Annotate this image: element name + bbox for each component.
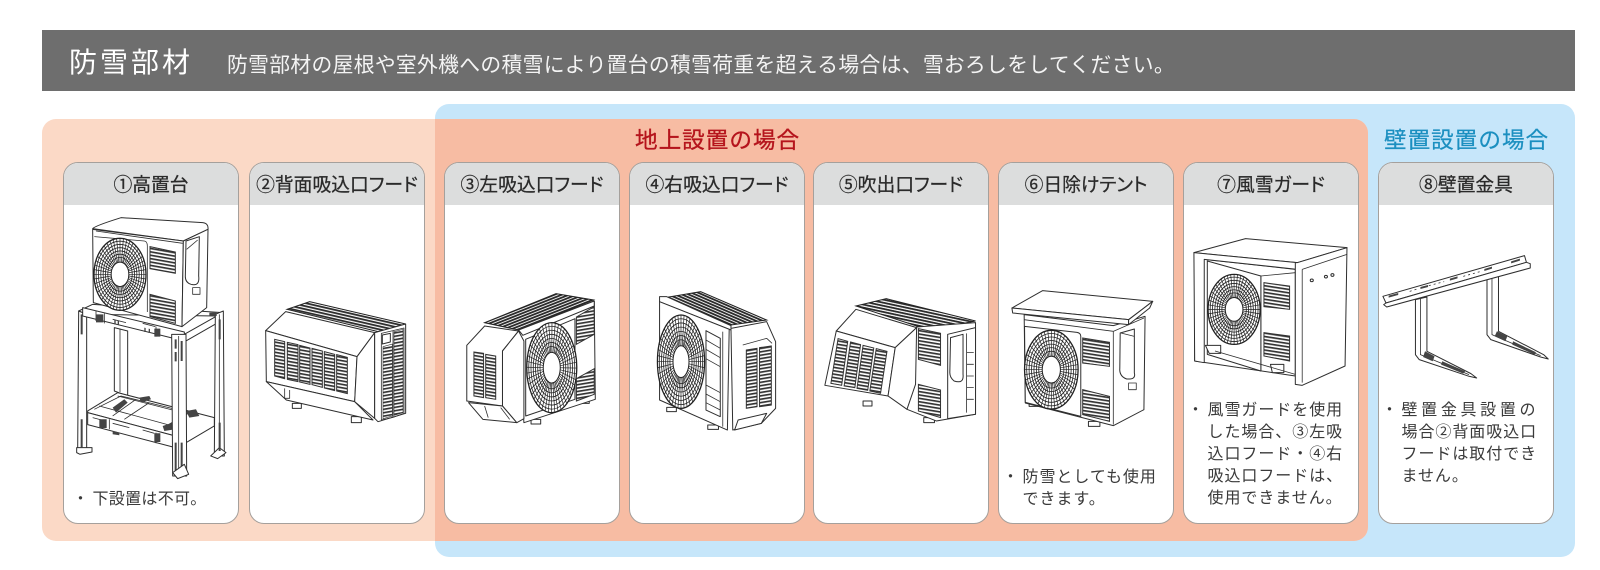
note <box>1188 401 1343 507</box>
note: ・ <box>1002 468 1019 486</box>
note: 使用できません。 <box>1208 490 1343 507</box>
note: 場合②背面吸込口 <box>1402 424 1537 441</box>
panel: overlap of ground-mount and wall-mount <box>435 119 1368 541</box>
illustration: left intake hood on unit <box>466 293 596 424</box>
illustration: outdoor unit on high stand <box>76 217 226 480</box>
illustration: outlet hood on unit <box>824 298 976 424</box>
card title <box>445 164 619 205</box>
card title <box>1184 164 1358 205</box>
card title: ⑤吹出口フード <box>839 174 963 195</box>
note: ・ <box>1188 402 1204 418</box>
card title: ②背面吸込口フード <box>256 174 418 195</box>
note: 吸込口フードは、 <box>1208 468 1343 485</box>
card title <box>1379 164 1553 205</box>
note: ません。 <box>1402 468 1469 485</box>
note: ・ <box>72 490 89 508</box>
card title <box>64 164 238 205</box>
illustration: right intake hood on unit <box>656 291 776 430</box>
panel: wall-mount background <box>435 104 1575 557</box>
note: 壁置金具設置の <box>1402 402 1539 418</box>
note: できます。 <box>1022 491 1106 508</box>
card title: ⑧壁置金具 <box>1419 174 1513 195</box>
note: 下設置は不可。 <box>92 490 207 508</box>
card 1: high stand <box>63 162 239 524</box>
card 3: left intake hood <box>444 162 620 524</box>
card title <box>630 164 804 205</box>
card title: ⑦風雪ガード <box>1217 174 1325 195</box>
header band <box>42 30 1575 91</box>
card 7: wind and snow guard <box>1183 162 1359 524</box>
heading: wall installation: 壁置設置の場合 <box>1384 128 1549 153</box>
note: 防雪としても使用 <box>1022 468 1157 486</box>
card 5: outlet hood <box>813 162 989 524</box>
note <box>1382 401 1539 485</box>
note <box>1002 468 1157 508</box>
note: した場合、③左吸 <box>1208 424 1343 441</box>
card 8: wall bracket <box>1378 162 1554 524</box>
panel: ground-mount background <box>42 119 1368 541</box>
card title <box>814 164 988 205</box>
illustration: wall mounting bracket <box>1382 255 1549 378</box>
header description: 防雪部材の屋根や室外機への積雪により置台の積雪荷重を超える場合は、雪おろしをしてください。 <box>227 54 1175 77</box>
heading: ground installation: 地上設置の場合 <box>635 128 800 153</box>
note: 風雪ガードを使用 <box>1208 402 1343 418</box>
card title: ③左吸込口フード <box>461 174 603 195</box>
heading: 防雪部材: 防雪部材 <box>69 47 193 78</box>
note: 込口フード・④右 <box>1208 446 1343 463</box>
illustration: rear intake hood on unit <box>265 301 406 424</box>
card 2: rear intake hood <box>249 162 425 524</box>
illustration: sunshade tent over unit <box>1011 290 1154 427</box>
card 6: sunshade tent <box>998 162 1174 524</box>
card title <box>999 164 1173 205</box>
card title <box>250 164 424 205</box>
card title: ④右吸込口フード <box>646 174 788 195</box>
card 4: right intake hood <box>629 162 805 524</box>
card title: ①高置台 <box>113 174 189 195</box>
card title: ⑥日除けテント <box>1025 174 1147 195</box>
note: ・ <box>1382 402 1398 418</box>
note: フードは取付でき <box>1402 446 1537 463</box>
illustration: wind and snow guard on unit <box>1193 238 1348 386</box>
